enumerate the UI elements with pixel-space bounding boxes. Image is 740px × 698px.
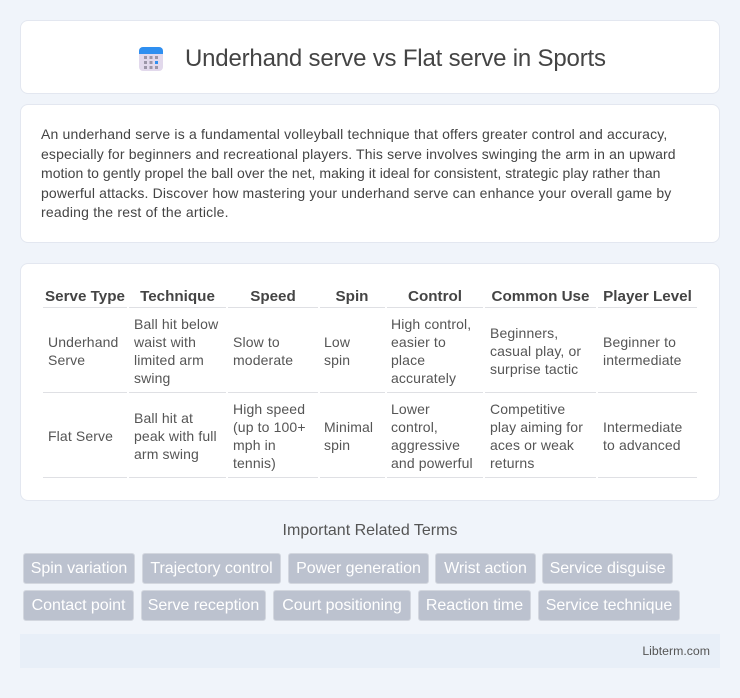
table headers: Spin [336, 288, 368, 305]
intro text: especially for beginners and recreational players. This serve involves swinging the arm in an upward [41, 146, 676, 162]
related term tags: Court positioning [282, 597, 402, 614]
related term tags: Contact point [32, 597, 125, 614]
title: Underhand serve vs Flat serve in Sports [185, 45, 606, 72]
related term tags: Power generation [296, 560, 421, 577]
related term tags: Service disguise [550, 560, 665, 577]
table headers: Player Level [603, 288, 692, 305]
table row: underhand serve: limited arm [134, 352, 204, 368]
table row: flat serve: returns [490, 455, 534, 471]
table row: flat serve: and powerful [391, 455, 473, 471]
related term tags: Reaction time [426, 597, 523, 614]
heading: related terms: Important Related Terms [283, 522, 457, 539]
table row: flat serve: Lower [391, 401, 430, 417]
table row: underhand serve: moderate [233, 352, 293, 368]
table row: underhand serve: surprise tactic [490, 361, 578, 377]
related term tags: Wrist action [444, 560, 527, 577]
intro text: powerful attacks. Discover how mastering your underhand serve can enhance your overall game by [41, 185, 671, 201]
footer: source [20, 634, 720, 668]
icon: calendar [139, 47, 163, 71]
table headers: Technique [140, 288, 215, 305]
related term tags: Service technique [546, 597, 672, 614]
related term tags: Serve reception [148, 597, 259, 614]
table row: underhand serve: Slow to [233, 334, 280, 350]
table row: flat serve: aces or weak [490, 437, 574, 453]
table row: underhand serve: Beginners, [490, 325, 558, 341]
table row: underhand serve: Serve [48, 352, 85, 368]
table headers: Speed [250, 288, 296, 305]
panel: introduction [20, 104, 720, 243]
related term tags [23, 553, 680, 621]
table row: underhand serve: Underhand [48, 334, 118, 350]
table row: flat serve: Flat Serve [48, 428, 113, 444]
table row: flat serve: Competitive [490, 401, 565, 417]
table headers: Control [408, 288, 462, 305]
table row: underhand serve: Ball hit below [134, 316, 218, 332]
related term tags: Spin variation [31, 560, 127, 577]
table row: underhand serve: spin [324, 352, 350, 368]
table row: flat serve: arm swing [134, 446, 199, 462]
table row: underhand serve: accurately [391, 370, 456, 386]
source label: Libterm.com [642, 644, 710, 658]
table row: underhand serve: easier to [391, 334, 446, 350]
table headers [45, 288, 692, 305]
table row: flat serve: spin [324, 437, 350, 453]
table row: underhand serve [48, 316, 682, 386]
table headers: Common Use [492, 288, 589, 305]
table row: underhand serve: swing [134, 370, 170, 386]
panel: title header [20, 20, 720, 94]
table row: underhand serve: casual play, or [490, 343, 581, 359]
table row: flat serve: Minimal [324, 419, 373, 435]
table row: underhand serve: place [391, 352, 425, 368]
table row: flat serve: play aiming for [490, 419, 583, 435]
intro text: motion to gently propel the ball over the net, making it ideal for consistent, strategic play rather than [41, 165, 661, 181]
table row: underhand serve: intermediate [603, 352, 682, 368]
table row: flat serve [48, 401, 682, 471]
table row: underhand serve: High control, [391, 316, 471, 332]
table row: flat serve: to advanced [603, 437, 681, 453]
table row: flat serve: tennis) [233, 455, 276, 471]
intro text: An underhand serve is a fundamental volleyball technique that offers greater control and accuracy, [41, 126, 668, 142]
table row: flat serve: Intermediate [603, 419, 682, 435]
table row: underhand serve: Beginner to [603, 334, 676, 350]
intro text [41, 126, 676, 220]
table row: underhand serve: Low [324, 334, 350, 350]
table row: underhand serve: waist with [134, 334, 196, 350]
table headers: Serve Type [45, 288, 125, 305]
table row: flat serve: aggressive [391, 437, 460, 453]
table row: flat serve: (up to 100+ [233, 419, 306, 435]
table row: flat serve: control, [391, 419, 438, 435]
table row: flat serve: Ball hit at [134, 410, 193, 426]
related term tags: Trajectory control [150, 560, 273, 577]
intro text: reading the rest of the article. [41, 204, 229, 220]
panel: comparison table [20, 263, 720, 501]
table row: flat serve: mph in [233, 437, 276, 453]
table row: flat serve: High speed [233, 401, 305, 417]
table row: flat serve: peak with full [134, 428, 217, 444]
